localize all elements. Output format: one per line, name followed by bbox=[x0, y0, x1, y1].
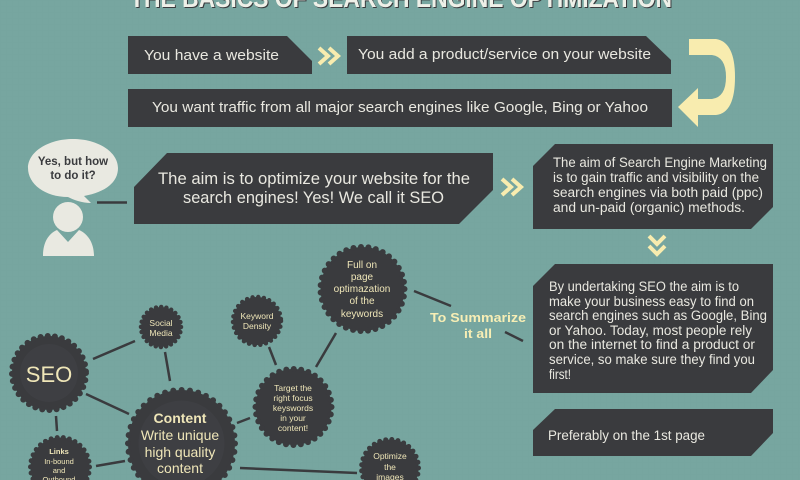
node: links bbox=[30, 438, 90, 480]
box: by undertaking SEO: first! bbox=[549, 367, 571, 382]
node: content bbox=[128, 390, 235, 480]
arrow: double chevron down bbox=[649, 236, 665, 254]
node: optimize the images: the bbox=[384, 462, 396, 472]
node: target keywords: Target the bbox=[274, 383, 312, 393]
node: full on page optimazation bbox=[320, 247, 404, 331]
node: links: Links bbox=[49, 447, 69, 456]
node: full on page optimazation: of the bbox=[349, 296, 375, 307]
label: to summarize it all bbox=[430, 310, 526, 341]
node: content: Write unique bbox=[141, 427, 219, 443]
box: search engine marketing: The aim of Search Engine Marketing bbox=[553, 155, 767, 170]
box: by undertaking SEO bbox=[533, 264, 773, 393]
box: aim: search engines! Yes! We call it SEO bbox=[183, 188, 444, 207]
step: want traffic: You want traffic from all major search engines like Google, Bing or Yahoo bbox=[152, 99, 648, 116]
step: you have a website: You have a website bbox=[144, 47, 279, 64]
speech bubble: Yes, but how bbox=[38, 156, 108, 168]
node: social media bbox=[141, 307, 181, 347]
node: full on page optimazation: keywords bbox=[341, 309, 383, 320]
box: aim: The aim is to optimize your website for the bbox=[158, 169, 470, 188]
node: social media: Media bbox=[149, 328, 173, 338]
box: by undertaking SEO: or Yahoo. Today, most people rely bbox=[549, 323, 752, 338]
node: social media: Social bbox=[149, 318, 173, 328]
node: target keywords: keyswords bbox=[273, 403, 313, 413]
step: add a product bbox=[347, 36, 671, 74]
node: content: Content bbox=[154, 410, 207, 426]
box: search engine marketing: search engines via both paid (ppc) bbox=[553, 185, 763, 200]
node: target keywords: right focus bbox=[273, 393, 313, 403]
node: full on page optimazation: optimazation bbox=[334, 284, 390, 295]
box: by undertaking SEO: service, so make sure they find you bbox=[549, 352, 755, 367]
node: SEO: SEO bbox=[26, 362, 72, 387]
box: search engine marketing: and un-paid (organic) methods. bbox=[553, 200, 745, 215]
step: you have a website bbox=[128, 36, 312, 74]
box: search engine marketing bbox=[533, 144, 773, 229]
node: optimize the images bbox=[362, 440, 418, 480]
arrow: double chevron right bbox=[319, 48, 338, 64]
connector line bbox=[97, 201, 127, 204]
step: want traffic bbox=[128, 89, 672, 127]
node: full on page optimazation: page bbox=[351, 272, 374, 283]
step: add a product: You add a product/service on your website bbox=[358, 46, 651, 63]
icon: person bbox=[43, 202, 94, 256]
node: keyword density: Keyword bbox=[240, 311, 274, 321]
box: aim bbox=[134, 153, 493, 224]
box: by undertaking SEO: make your business easy to find on bbox=[549, 294, 754, 309]
node: content: high quality bbox=[145, 444, 215, 460]
node: keyword density bbox=[233, 297, 281, 345]
node: content: content bbox=[157, 460, 203, 476]
label: to summarize it all: it all bbox=[464, 326, 492, 341]
network connector lines bbox=[56, 291, 523, 473]
node: links: In-bound bbox=[44, 457, 74, 466]
box: preferably on the 1st page bbox=[533, 409, 773, 456]
box: by undertaking SEO: By undertaking SEO the aim is to bbox=[549, 279, 739, 294]
node: target keywords bbox=[256, 369, 332, 445]
box: search engine marketing: is to gain traffic and visibility on the bbox=[553, 170, 759, 185]
node: keyword density: Density bbox=[243, 321, 272, 331]
box: by undertaking SEO: search engines such as Google, Bing bbox=[549, 308, 767, 323]
arrow: double chevron right bbox=[502, 179, 521, 195]
arrow: curved return bbox=[678, 39, 735, 127]
node: links: and bbox=[53, 466, 65, 475]
label: to summarize it all: To Summarize bbox=[430, 310, 526, 325]
speech bubble bbox=[28, 139, 118, 203]
box: by undertaking SEO: on the internet to find a product or bbox=[549, 337, 756, 352]
node: target keywords: content! bbox=[278, 423, 308, 433]
node: optimize the images: Optimize bbox=[373, 451, 407, 461]
node: full on page optimazation: Full on bbox=[347, 260, 377, 271]
speech bubble: to do it? bbox=[50, 170, 96, 182]
node: SEO bbox=[12, 336, 86, 410]
node: target keywords: in your bbox=[280, 413, 306, 423]
box: preferably on the 1st page: Preferably on the 1st page bbox=[548, 428, 705, 443]
